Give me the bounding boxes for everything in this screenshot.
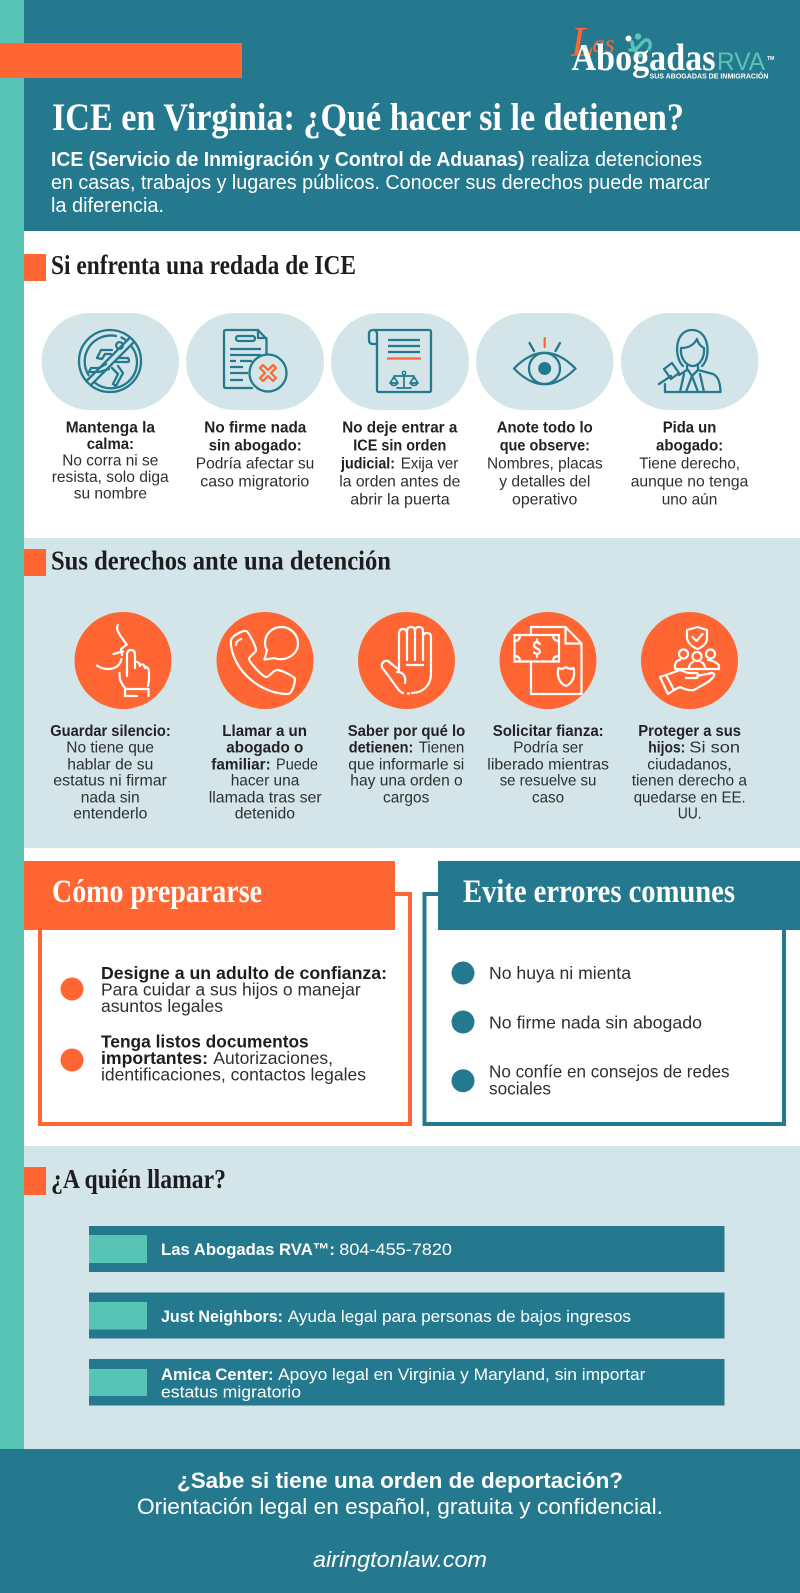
right 3: saber por que: hay una orden o — [350, 773, 463, 790]
right 2: llamar: llamada tras ser — [209, 789, 322, 806]
tip 4: anote: y detalles del — [499, 474, 590, 491]
right 1: guardar silencio: nada sin — [81, 789, 140, 806]
footer subtext: Orientación legal en español, gratuita y confidencial. — [137, 1494, 663, 1519]
heading banner — [24, 861, 395, 930]
item: adulto de confianza: Para cuidar a sus hijos o manejar — [101, 980, 361, 1000]
icon: lawyer — [659, 330, 720, 392]
right 1: guardar silencio: hablar de su — [67, 756, 153, 773]
right 3: saber por que: que informarle si — [348, 756, 464, 773]
item: redes sociales: sociales — [489, 1078, 551, 1098]
right 5: proteger hijos: tienen derecho a — [632, 773, 747, 790]
item: documentos: Autorizaciones, — [213, 1048, 333, 1068]
panel: sus derechos — [24, 538, 800, 848]
right 3: saber por que: cargos — [383, 789, 429, 806]
left accent bar — [0, 0, 24, 1449]
panel: header — [0, 0, 800, 231]
tip 1: mantenga la calma: No corra ni se — [62, 453, 158, 470]
right 5: proteger hijos: Si son — [689, 740, 740, 757]
panel: si enfrenta una redada — [24, 250, 758, 509]
right 2: llamar: detenido — [235, 806, 295, 823]
icon: silence — [74, 612, 172, 709]
right 5: proteger hijos: Proteger a sus — [638, 723, 741, 740]
intro text: en casas, trabajos y lugares públicos. Conocer sus derechos puede marcar — [51, 172, 710, 194]
right 2: llamar: hacer una — [231, 773, 299, 790]
heading: Si enfrenta una redada de ICE — [51, 250, 356, 280]
right 4: solicitar fianza: Solicitar fianza: — [493, 723, 604, 740]
tip 2: no firme: Podría afectar su — [196, 456, 314, 473]
logo: L — [570, 20, 594, 66]
intro text: la diferencia. — [51, 195, 164, 217]
right 3: saber por que — [348, 723, 466, 806]
right 2: llamar: Llamar a un — [222, 723, 307, 740]
item: adulto de confianza — [60, 963, 387, 1016]
right 4: solicitar fianza: Podría ser — [513, 740, 584, 757]
contact: las abogadas: Las Abogadas RVA™: — [161, 1240, 335, 1259]
tip 2: no firme: sin abogado: — [209, 438, 302, 455]
icon: eye — [514, 338, 576, 384]
right 1: guardar silencio — [50, 723, 171, 823]
orange accent tab — [0, 43, 242, 78]
right 2: llamar: abogado o — [226, 740, 304, 757]
right 1: guardar silencio: entenderlo — [73, 806, 147, 823]
contact: amica center: Apoyo legal en Virginia y Maryland, sin importar — [278, 1365, 646, 1384]
logo: TM — [767, 56, 774, 62]
item: no firme: No firme nada sin abogado — [489, 1012, 702, 1032]
contact: las abogadas — [89, 1226, 724, 1272]
tip 1: mantenga la calma: resista, solo diga — [52, 469, 169, 486]
icon: no running — [79, 330, 141, 392]
tip 3: no deje entrar: judicial: — [340, 456, 395, 473]
right 4: solicitar fianza: liberado mientras — [487, 756, 609, 773]
panel: footer — [0, 1449, 800, 1593]
right 2: llamar: Puede — [276, 756, 318, 773]
tip 4: anote — [487, 420, 603, 509]
tip 5: pida un abogado: Pida un — [663, 420, 716, 437]
tip 5: pida un abogado: uno aún — [662, 492, 717, 509]
right 2: llamar — [209, 723, 322, 823]
contact: just neighbors — [89, 1292, 724, 1338]
right 3: saber por que: detienen: — [349, 740, 413, 757]
icon: document with x — [224, 330, 286, 392]
website: airingtonlaw.com — [313, 1547, 487, 1572]
tip 5: pida un abogado — [631, 420, 748, 509]
tip 4: anote: operativo — [512, 492, 577, 509]
logo — [570, 20, 774, 80]
contact: las abogadas: 804-455-7820 — [339, 1240, 452, 1259]
tip 3: no deje entrar — [339, 420, 460, 509]
right 5: proteger hijos: hijos: — [648, 740, 685, 757]
right 5: proteger hijos: quedarse en EE. — [634, 789, 746, 806]
tip 1: mantenga la calma: su nombre — [74, 486, 147, 503]
panel: a quien llamar — [24, 1146, 800, 1449]
intro text: realiza detenciones — [531, 149, 702, 171]
intro text: ICE (Servicio de Inmigración y Control de Aduanas) — [51, 149, 524, 171]
logo: RVA — [717, 48, 765, 76]
icon: judicial order scroll — [369, 330, 431, 392]
heading: ¿A quién llamar? — [51, 1164, 226, 1194]
panel: como prepararse — [24, 861, 410, 1124]
tip 5: pida un abogado: abogado: — [656, 438, 723, 455]
item: redes sociales — [452, 1062, 730, 1098]
tip 1: mantenga la calma — [52, 420, 169, 503]
tip 3: no deje entrar: ICE sin orden — [353, 438, 446, 455]
item: documentos: identificaciones, contactos legales — [101, 1064, 366, 1084]
logo: Abogadas — [572, 37, 716, 79]
panel: evite errores — [424, 861, 800, 1124]
logo: as — [592, 31, 615, 58]
tip 2: no firme — [196, 420, 314, 491]
tip 2: no firme: caso migratorio — [200, 474, 309, 491]
logo: SUS ABOGADAS DE INMIGRACIÓN — [650, 72, 768, 80]
right 2: llamar: familiar: — [211, 756, 271, 773]
icon: protect children — [641, 612, 738, 709]
item: documentos: importantes: — [101, 1048, 208, 1068]
heading banner: Cómo prepararse — [52, 874, 262, 910]
contact: just neighbors: Just Neighbors: — [161, 1307, 283, 1326]
right 3: saber por que: Saber por qué lo — [348, 723, 466, 740]
heading: Sus derechos ante una detención — [51, 545, 391, 575]
right 5: proteger hijos — [632, 723, 747, 823]
item: documentos: Tenga listos documentos — [101, 1031, 309, 1051]
item: adulto de confianza: asuntos legales — [101, 996, 223, 1016]
right 5: proteger hijos: ciudadanos, — [647, 756, 732, 773]
tip 3: no deje entrar: No deje entrar a — [342, 420, 457, 437]
right 4: solicitar fianza: se resuelve su — [500, 773, 596, 790]
tips text — [52, 420, 748, 509]
tip 4: anote: que observe: — [500, 438, 590, 455]
tip 2: no firme: No firme nada — [204, 420, 306, 437]
icon pills row — [42, 313, 758, 410]
tip 5: pida un abogado: aunque no tenga — [631, 474, 748, 491]
item: redes sociales: No confíe en consejos de redes — [489, 1062, 730, 1082]
right 1: guardar silencio: estatus ni firmar — [53, 773, 168, 790]
item: documentos — [60, 1031, 366, 1084]
right 3: saber por que: Tienen — [419, 740, 464, 757]
tip 4: anote: Anote todo lo — [497, 420, 593, 437]
icon: phone call — [216, 612, 314, 709]
heading banner — [438, 861, 800, 930]
right 5: proteger hijos: UU. — [678, 806, 702, 823]
heading banner: Evite errores comunes — [463, 874, 735, 910]
contact: amica center — [89, 1359, 724, 1406]
item: no huya: No huya ni mienta — [489, 963, 631, 983]
right 4: solicitar fianza — [487, 723, 609, 806]
contact: amica center: estatus migratorio — [161, 1383, 301, 1402]
title: ICE en Virginia: ¿Qué hacer si le detienen? — [52, 96, 684, 139]
icon: bail money — [500, 612, 596, 709]
tip 3: no deje entrar: Exija ver — [401, 456, 459, 473]
right 1: guardar silencio: Guardar silencio: — [50, 723, 171, 740]
intro text — [51, 149, 710, 217]
right 4: solicitar fianza: caso — [532, 789, 564, 806]
tip 3: no deje entrar: la orden antes de — [339, 474, 460, 491]
tip 4: anote: Nombres, placas — [487, 456, 603, 473]
footer question: ¿Sabe si tiene una orden de deportación? — [177, 1468, 623, 1493]
tip 1: mantenga la calma: calma: — [87, 436, 134, 453]
contact: amica center: Amica Center: — [161, 1365, 274, 1384]
rights text — [50, 723, 747, 823]
item: adulto de confianza: Designe a un adulto de confianza: — [101, 963, 387, 983]
right 1: guardar silencio: No tiene que — [66, 740, 154, 757]
tip 3: no deje entrar: abrir la puerta — [350, 492, 450, 509]
tip 5: pida un abogado: Tiene derecho, — [639, 456, 740, 473]
contact: just neighbors: Ayuda legal para personas de bajos ingresos — [288, 1307, 631, 1326]
tip 1: mantenga la calma: Mantenga la — [66, 420, 155, 437]
item: no huya — [452, 962, 631, 984]
icon: raised hand — [358, 612, 455, 709]
